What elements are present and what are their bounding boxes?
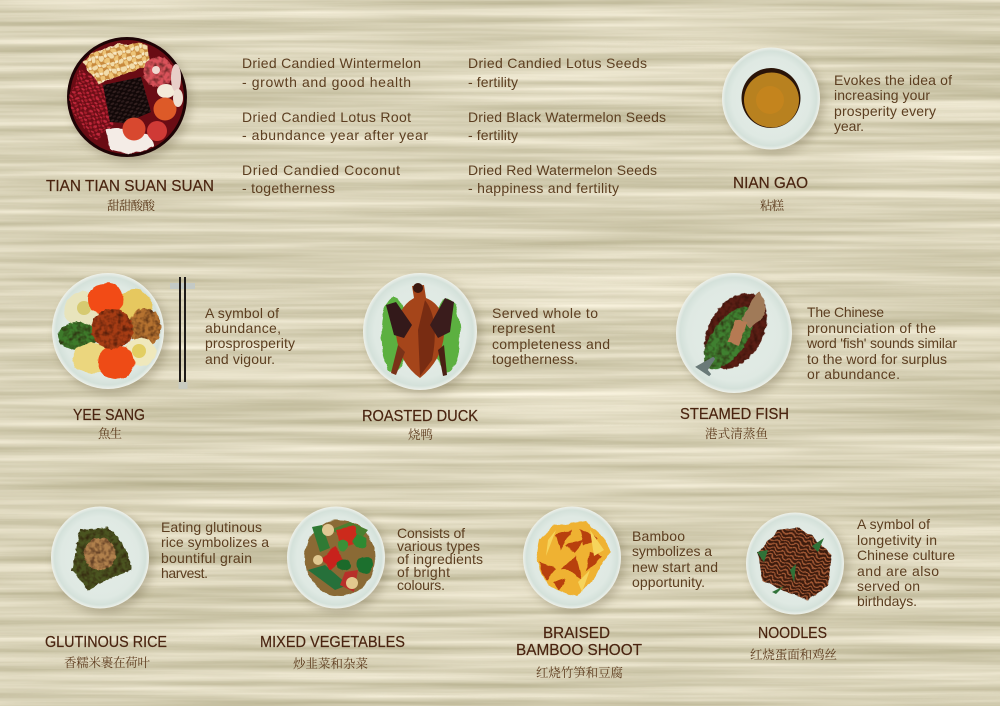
description: Bamboo bbox=[632, 528, 685, 544]
dish: tian tian suan suan bbox=[46, 37, 214, 213]
description: new start and bbox=[632, 559, 718, 575]
dish: nian gao bbox=[722, 48, 952, 213]
description: The Chinese bbox=[807, 304, 884, 320]
icon: chopsticks on rest bbox=[170, 277, 195, 389]
dish: steamed fish bbox=[676, 273, 957, 441]
dish: roasted duck bbox=[362, 273, 610, 442]
chinese name: 港式清蒸鱼 bbox=[705, 426, 768, 441]
description: year. bbox=[834, 118, 864, 134]
description: pronunciation of the bbox=[807, 320, 936, 336]
dish: yee sang bbox=[52, 273, 295, 441]
description bbox=[161, 519, 269, 581]
heading: STEAMED FISH bbox=[680, 406, 789, 423]
meanings list: column two: Dried Red Watermelon Seeds bbox=[468, 162, 657, 178]
meanings list: column two: - happiness and fertility bbox=[468, 180, 619, 196]
description: of bright bbox=[397, 564, 450, 580]
description bbox=[834, 72, 952, 134]
heading: NIAN GAO bbox=[733, 175, 808, 192]
description: A symbol of bbox=[205, 305, 279, 321]
chinese name: 红烧蛋面和鸡丝 bbox=[750, 647, 837, 662]
description: of ingredients bbox=[397, 551, 483, 567]
chinese name: 甜甜酸酸 bbox=[107, 198, 155, 213]
bowl with candied treats bbox=[67, 37, 191, 162]
description: increasing your bbox=[834, 87, 930, 103]
plate with duck bbox=[363, 273, 481, 394]
description: various types bbox=[397, 538, 480, 554]
description bbox=[806, 304, 957, 382]
heading: YEE SANG bbox=[73, 407, 145, 424]
chinese name: 红烧竹笋和豆腐 bbox=[536, 665, 623, 680]
meanings list: column one: - abundance year after year bbox=[242, 127, 428, 143]
description: abundance, bbox=[205, 320, 281, 336]
description: to the word for surplus bbox=[807, 351, 947, 367]
meanings list: column one: Dried Candied Lotus Root bbox=[242, 109, 411, 125]
meanings list: column two bbox=[468, 55, 666, 196]
meanings list: column one: Dried Candied Wintermelon bbox=[242, 55, 421, 71]
description: and vigour. bbox=[205, 351, 275, 367]
dish: mixed vegetables bbox=[260, 506, 483, 671]
chinese name: 魚生 bbox=[98, 426, 122, 441]
description: Eating glutinous bbox=[161, 519, 262, 535]
description: and are also bbox=[857, 563, 939, 579]
description: word 'fish' sounds similar bbox=[806, 335, 957, 351]
meanings list: column two: Dried Black Watermelon Seeds bbox=[468, 109, 666, 125]
heading, two lines bbox=[516, 625, 643, 659]
description: longetivity in bbox=[857, 532, 937, 548]
description: symbolizes a bbox=[632, 543, 712, 559]
heading: NOODLES bbox=[758, 625, 827, 642]
description: A symbol of bbox=[857, 516, 930, 532]
description: represent bbox=[492, 320, 555, 336]
description: bountiful grain bbox=[161, 550, 252, 566]
meanings list: column two: Dried Candied Lotus Seeds bbox=[468, 55, 647, 71]
heading, two lines: BRAISED bbox=[543, 625, 610, 642]
heading: TIAN TIAN SUAN SUAN bbox=[46, 178, 214, 195]
dish: braised bamboo shoot bbox=[516, 506, 718, 680]
chinese name: 香糯米裹在荷叶 bbox=[64, 655, 150, 670]
description bbox=[397, 525, 483, 593]
description: prosperity every bbox=[834, 103, 936, 119]
plate with rice cake bbox=[722, 48, 824, 154]
description: Consists of bbox=[397, 525, 465, 541]
description: served on bbox=[857, 578, 920, 594]
description bbox=[857, 516, 955, 609]
description: colours. bbox=[397, 577, 445, 593]
plate with stir fry bbox=[287, 506, 389, 613]
heading: MIXED VEGETABLES bbox=[260, 634, 405, 651]
plate with noodles bbox=[746, 512, 848, 619]
plate with bamboo bbox=[523, 506, 625, 613]
description: completeness and bbox=[492, 336, 610, 352]
description: Chinese culture bbox=[857, 547, 955, 563]
description: Evokes the idea of bbox=[834, 72, 952, 88]
description bbox=[632, 528, 718, 590]
plate with rice in lotus leaf bbox=[51, 506, 153, 613]
meanings list: column one: - togetherness bbox=[242, 180, 335, 196]
meanings list: column one bbox=[242, 55, 428, 196]
plate with salad bbox=[52, 273, 168, 394]
description: harvest. bbox=[161, 565, 208, 581]
chinese name: 烧鸭 bbox=[408, 427, 433, 442]
heading: GLUTINOUS RICE bbox=[45, 634, 167, 651]
plate with fish bbox=[676, 273, 796, 398]
dish: glutinous rice bbox=[45, 506, 269, 670]
description bbox=[492, 305, 610, 367]
dish: noodles bbox=[746, 512, 955, 662]
description: opportunity. bbox=[632, 574, 705, 590]
description: prosprosperity bbox=[205, 335, 295, 351]
description: togetherness. bbox=[492, 351, 578, 367]
heading, two lines: BAMBOO SHOOT bbox=[516, 642, 643, 659]
meanings list: column one: - growth and good health bbox=[242, 74, 411, 90]
chinese name: 粘糕 bbox=[760, 198, 784, 213]
heading: ROASTED DUCK bbox=[362, 408, 479, 425]
description: birthdays. bbox=[857, 593, 917, 609]
description: rice symbolizes a bbox=[161, 534, 269, 550]
description: Served whole to bbox=[492, 305, 598, 321]
description bbox=[205, 305, 295, 367]
meanings list: column two: - fertility bbox=[468, 74, 518, 90]
meanings list: column one: Dried Candied Coconut bbox=[242, 162, 400, 178]
description: or abundance. bbox=[807, 366, 900, 382]
chinese name: 炒韭菜和杂菜 bbox=[293, 656, 368, 671]
meanings list: column two: - fertility bbox=[468, 127, 518, 143]
